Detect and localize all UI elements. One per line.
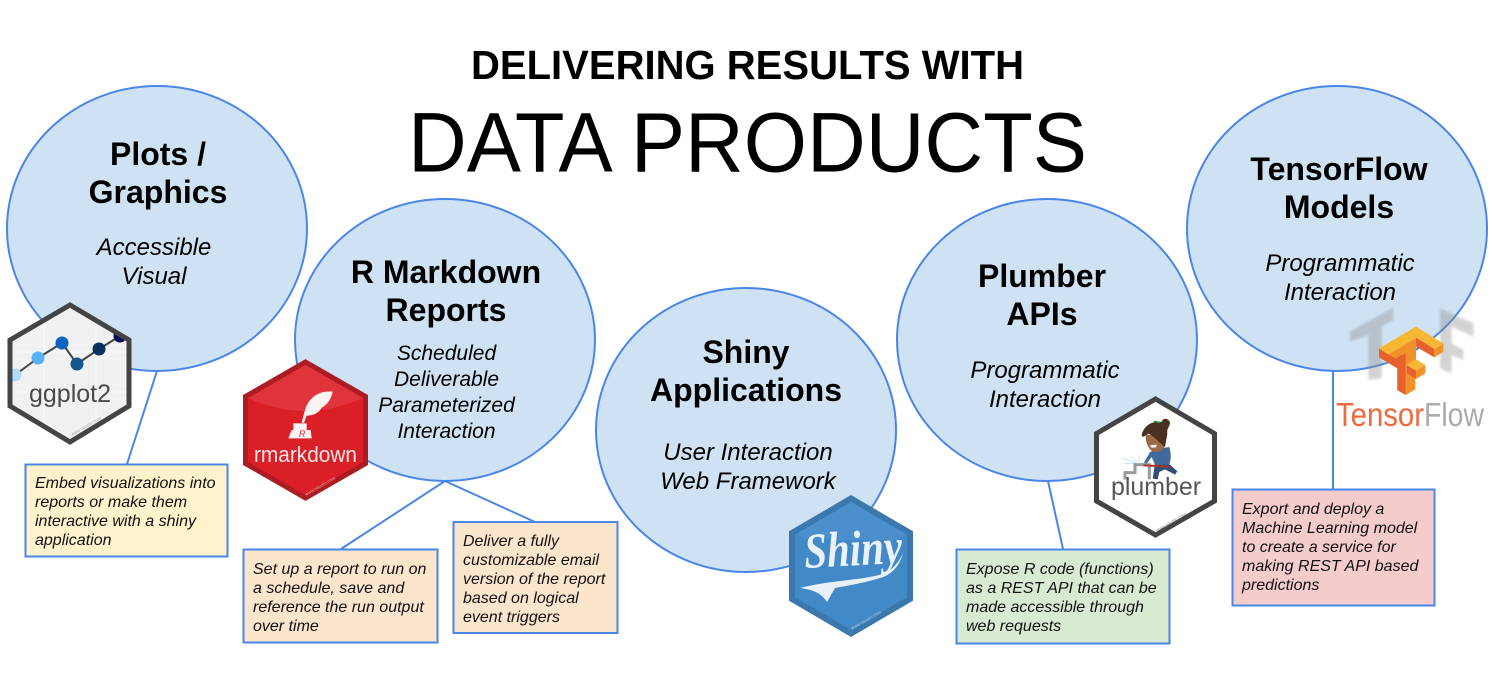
title: DELIVERING RESULTS WITH (471, 42, 1024, 88)
callout: email note: Deliver a fully (463, 533, 560, 550)
callout: email note: event triggers (463, 609, 560, 626)
panel: Plumber APIs: APIs (1006, 296, 1078, 332)
callout: plots note: reports or make them (35, 494, 187, 511)
callout: email note (454, 522, 618, 633)
icon: Shiny hex: www.rstudio.com (850, 609, 882, 631)
panel: Plumber APIs: Programmatic (970, 357, 1120, 384)
callout: plots note: Embed visualizations into (35, 475, 216, 492)
callout: schedule note: Set up a report to run on (253, 561, 427, 578)
icon: plumber hex: plumber (1111, 473, 1201, 501)
panel: plots and graphics (7, 86, 307, 371)
panel: R Markdown reports: Interaction (397, 420, 496, 443)
callout: schedule note (244, 550, 438, 642)
icon: rmarkdown hex: R (299, 429, 306, 439)
panel: TensorFlow models: TensorFlow (1250, 151, 1428, 187)
panel: Shiny applications: Shiny (702, 334, 790, 370)
icon: TensorFlow logo: Flow (1424, 396, 1484, 433)
panel: Plumber APIs (897, 199, 1197, 481)
panel: R Markdown reports: Scheduled (397, 342, 497, 365)
panel: plots and graphics: Accessible (95, 234, 211, 261)
icon: plumber hex: www.rstudio.com (1155, 511, 1187, 533)
callout: email note: version of the report (463, 571, 606, 588)
title (408, 42, 1087, 190)
callout: plots note: interactive with a shiny (35, 513, 197, 530)
callout: plumber note: Expose R code (functions) (966, 561, 1154, 578)
callout: plumber note (956, 550, 1170, 644)
panel: Plumber APIs: Plumber (978, 258, 1106, 294)
icon: ggplot2 hex: www.rstudio.com (70, 415, 102, 437)
icon: Shiny hex (792, 498, 910, 634)
panel: TensorFlow models (1187, 86, 1487, 371)
icon: TensorFlow logo: Tensor (1336, 396, 1424, 433)
panel: TensorFlow models: Models (1284, 189, 1394, 225)
panel: Shiny applications: User Interaction (663, 439, 833, 466)
callout: email note: based on logical (463, 590, 579, 607)
callout: email note: customizable email (463, 552, 600, 569)
callout: schedule note: reference the run output (253, 599, 424, 616)
connector: reports to schedule note (341, 481, 445, 549)
callout: plots note: application (35, 532, 112, 549)
callout: plumber note: web requests (966, 618, 1061, 635)
panel: R Markdown reports: Reports (386, 292, 506, 328)
callout: tensorflow note: Export and deploy a (1242, 501, 1384, 518)
panel: plots and graphics: Graphics (89, 174, 227, 210)
panel: R Markdown reports: R Markdown (351, 254, 541, 290)
callout: tensorflow note: predictions (1241, 577, 1319, 594)
callout: plots note (26, 464, 228, 556)
icon: plumber hex (1096, 399, 1214, 535)
panel: R Markdown reports (295, 199, 595, 481)
callout: tensorflow note: Machine Learning model (1242, 520, 1418, 537)
panel: Shiny applications: Applications (650, 372, 842, 408)
icon: rmarkdown hex (246, 362, 366, 498)
panel: R Markdown reports: Parameterized (378, 394, 516, 417)
panel: Shiny applications: Web Framework (660, 468, 838, 495)
icon: rmarkdown hex: rmarkdown (254, 442, 357, 467)
panel: Plumber APIs: Interaction (989, 386, 1101, 413)
icon: ggplot2 hex: ggplot2 (29, 380, 111, 408)
connector: plumber to note (1048, 481, 1063, 549)
title: DATA PRODUCTS (408, 96, 1087, 190)
icon: ggplot2 hex (8, 303, 131, 444)
panel: TensorFlow models: Interaction (1284, 279, 1396, 306)
callout: schedule note: a schedule, save and (253, 580, 405, 597)
panel: plots and graphics: Visual (122, 263, 187, 290)
icon: Shiny hex: Shiny (803, 518, 904, 579)
callout: plumber note: as a REST API that can be (966, 580, 1157, 597)
callout: tensorflow note: making REST API based (1242, 558, 1419, 575)
callout: plumber note: made accessible through (966, 599, 1144, 616)
connector: reports to email note (445, 481, 535, 522)
connector: plots to note (127, 371, 157, 464)
icon: TensorFlow logo (1336, 307, 1484, 433)
panel: Shiny applications (596, 288, 896, 572)
panel: R Markdown reports: Deliverable (394, 368, 499, 391)
callout: schedule note: over time (253, 618, 319, 635)
connector: tensorflow to note (1332, 371, 1334, 489)
panel: TensorFlow models: Programmatic (1265, 250, 1415, 277)
callout: tensorflow note (1232, 490, 1434, 606)
icon: rmarkdown hex: www.rstudio.com (304, 475, 336, 497)
callout: tensorflow note: to create a service for (1242, 539, 1397, 556)
panel: plots and graphics: Plots / (110, 136, 206, 172)
